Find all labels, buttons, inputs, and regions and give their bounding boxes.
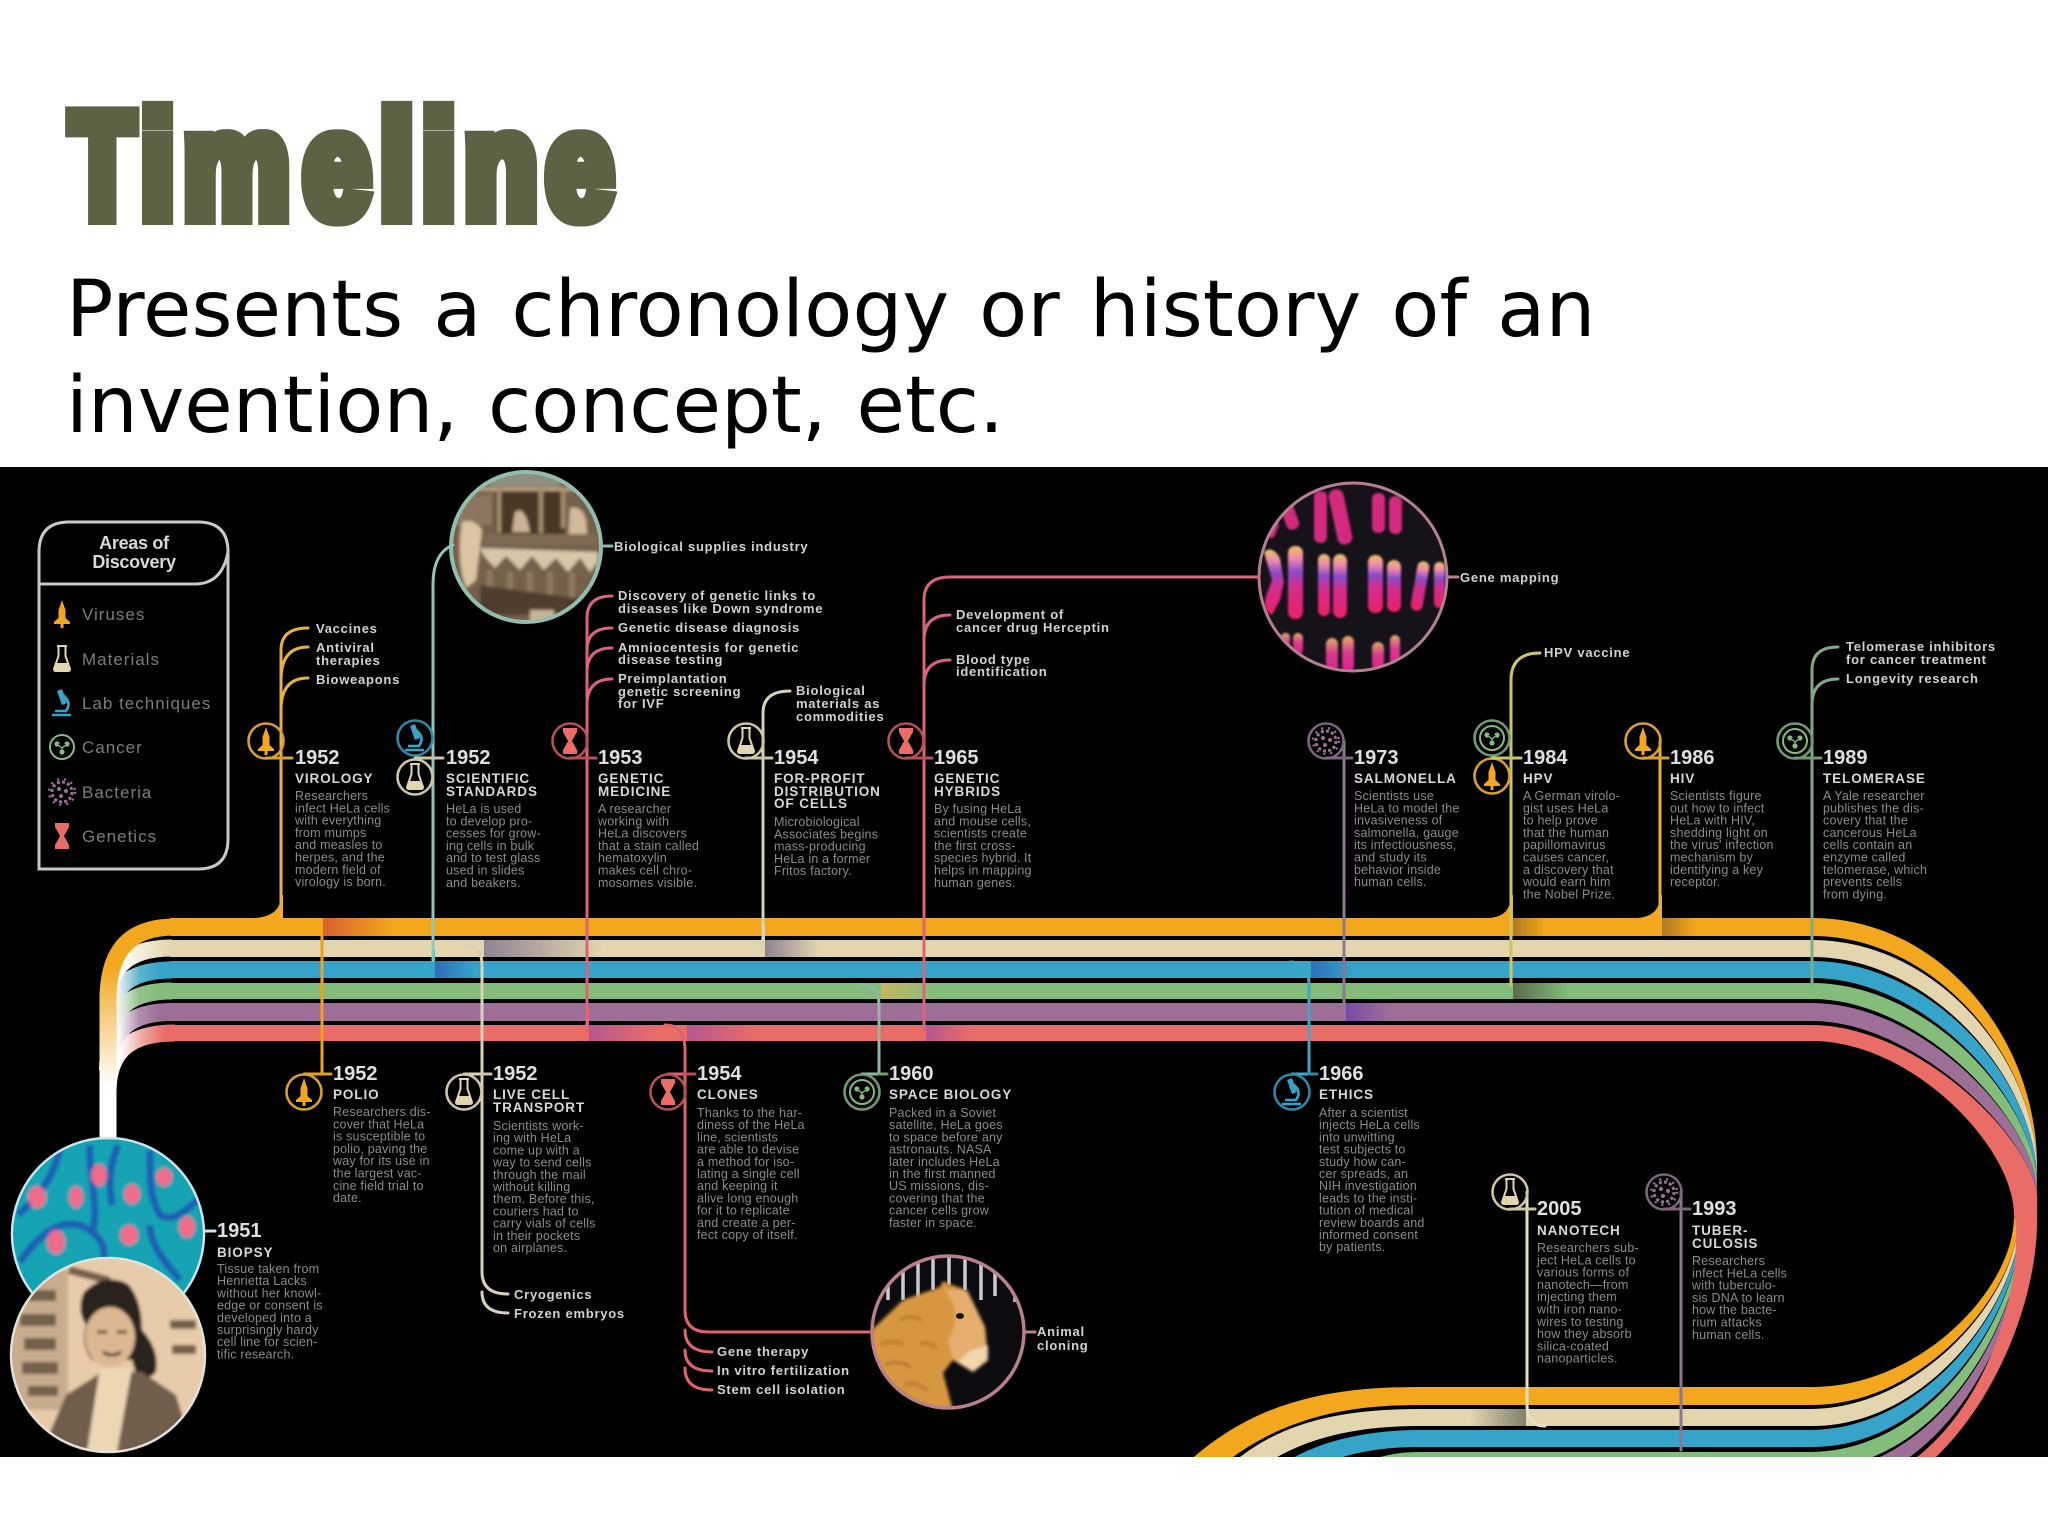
branch: 1966 ethics: NIH investigation	[1319, 1179, 1417, 1193]
branch: 1954 clones: line, scientists	[697, 1130, 778, 1144]
photo: cloned animal	[868, 1254, 1026, 1412]
branch: 1951 biopsy: developed into a	[217, 1311, 312, 1325]
branch: 1952 scientific standards: and beakers.	[446, 876, 521, 890]
branch: 1966 ethics: by patients.	[1319, 1240, 1385, 1254]
branch: 1989 telomerase: TELOMERASE	[1823, 771, 1926, 786]
branch: 1984 HPV: would earn him	[1522, 875, 1611, 889]
branch: 1954 clones: Animal	[1037, 1324, 1085, 1339]
branch: 1984 HPV: causes cancer,	[1523, 850, 1609, 864]
branch: 1966 ethics: study how can-	[1319, 1155, 1406, 1169]
branch: 1952 scientific standards	[398, 539, 808, 960]
branch: 1966 ethics: After a scientist	[1319, 1106, 1408, 1120]
branch: 1973 salmonella: invasiveness of	[1354, 814, 1443, 828]
branch: 1951 biopsy: edge or consent is	[217, 1299, 323, 1313]
icon: virus	[1626, 724, 1660, 758]
branch: 1965 genetic hybrids: human genes.	[934, 876, 1016, 890]
branch: 1952 polio: polio, paving the	[333, 1142, 427, 1156]
branch: 1952 live cell transport: way to send cells	[492, 1156, 592, 1170]
branch: 1984 HPV: HPV vaccine	[1544, 645, 1630, 660]
branch: 1986 HIV: identifying a key	[1670, 863, 1764, 877]
branch: 1952 scientific standards: and to test glass	[446, 851, 540, 865]
branch: 2005 nanotech: Researchers sub-	[1537, 1241, 1639, 1255]
branch: 1952 polio: cover that HeLa	[333, 1117, 424, 1131]
branch: 1952 scientific standards: cesses for grow-	[446, 827, 541, 841]
branch: 1952 polio: the largest vac-	[333, 1166, 422, 1180]
branch: 1953 genetic medicine: for IVF	[618, 696, 664, 711]
branch: 1952 live cell transport: on airplanes.	[493, 1241, 567, 1255]
legend item: lab techniques	[52, 689, 211, 715]
branch: 1951 biopsy: Henrietta Lacks	[217, 1274, 307, 1288]
branch: 1954 for-profit distribution	[728, 683, 884, 945]
branch: 1951 biopsy: 1951	[217, 1220, 262, 1242]
legend item: bacteria	[49, 779, 152, 805]
branch: 1960 space biology	[844, 985, 1012, 1230]
legend item: lab techniques: Lab techniques	[82, 694, 211, 713]
legend item: cancer	[50, 735, 143, 759]
icon: flask	[446, 1074, 482, 1110]
branch: 1952 polio	[286, 936, 431, 1205]
branch: 1993 tuberculosis: how the bacte-	[1692, 1303, 1777, 1317]
legend item: viruses	[54, 600, 145, 628]
branch: 1993 tuberculosis: human cells.	[1692, 1328, 1765, 1342]
branch: 1952 live cell transport: carry vials of cells	[493, 1217, 596, 1231]
branch: 2005 nanotech	[1492, 1174, 1639, 1426]
branch: 1973 salmonella: behavior inside	[1354, 863, 1441, 877]
branch: 1986 HIV: HIV	[1670, 771, 1695, 786]
branch: 1993 tuberculosis: Researchers	[1692, 1254, 1765, 1268]
icon: bacteria	[1646, 1174, 1682, 1210]
branch: 1993 tuberculosis: CULOSIS	[1692, 1236, 1758, 1251]
icon: cancer	[1474, 720, 1510, 756]
branch: 1989 telomerase: Telomerase inhibitors	[1846, 639, 1996, 654]
branch: 2005 nanotech: nanoparticles.	[1537, 1352, 1618, 1366]
branch: 1954 for-profit distribution: Associates begins	[774, 827, 878, 841]
branch: 1951 biopsy: without her knowl-	[216, 1286, 321, 1300]
branch: 1952 live cell transport: 1952	[493, 1063, 538, 1085]
icon: cancer	[1778, 724, 1812, 758]
branch: 1953 genetic medicine: Discovery of genetic links to	[618, 588, 816, 603]
branch: 1952 live cell transport: TRANSPORT	[493, 1100, 585, 1115]
branch: 1952 live cell transport: Scientists work-	[493, 1119, 584, 1133]
branch: 2005 nanotech: 2005	[1537, 1198, 1582, 1220]
branch: 1953 genetic medicine: diseases like Down syndrome	[618, 601, 823, 616]
branch: 1952 live cell transport: them. Before this,	[493, 1192, 595, 1206]
branch: 1954 clones: cloning	[1037, 1338, 1088, 1353]
branch: 1993 tuberculosis: sis DNA to learn	[1692, 1291, 1785, 1305]
branch: 1989 telomerase: 1989	[1823, 747, 1868, 769]
branch: 1984 HPV: papillomavirus	[1523, 838, 1606, 852]
branch: 2005 nanotech: NANOTECH	[1537, 1223, 1621, 1238]
branch: 1952 live cell transport: LIVE CELL	[493, 1087, 570, 1102]
branch: 1953 genetic medicine: GENETIC	[598, 771, 664, 786]
branch: 1952 virology: infect HeLa cells	[295, 801, 390, 815]
branch: 1952 scientific standards: HeLa is used	[446, 802, 521, 816]
branch: 1984 HPV: to help prove	[1523, 814, 1598, 828]
timeline ribbons	[108, 895, 2037, 1512]
branch: 1984 HPV: 1984	[1523, 747, 1568, 769]
branch: 1954 clones: for it to replicate	[697, 1204, 790, 1218]
branch: 1954 clones: a method for iso-	[697, 1155, 794, 1169]
branch: 1952 live cell transport: come up with a	[493, 1143, 580, 1157]
branch: 1986 HIV: out how to infect	[1670, 801, 1765, 815]
branch: 1951 biopsy: surprisingly hardy	[217, 1323, 319, 1337]
branch: 1993 tuberculosis: rium attacks	[1692, 1316, 1762, 1330]
branch: 1951 biopsy: Tissue taken from	[217, 1262, 319, 1276]
icon: flask	[1492, 1174, 1528, 1210]
branch: 1954 for-profit distribution: 1954	[774, 747, 819, 769]
branch: 1953 genetic medicine: that a stain called	[598, 839, 699, 853]
branch: 1984 HPV: that the human	[1523, 826, 1609, 840]
branch: 1952 scientific standards: to develop pro-	[446, 814, 532, 828]
branch: 1960 space biology: to space before any	[889, 1130, 1003, 1144]
branch: 1986 HIV: shedding light on	[1670, 826, 1768, 840]
branch: 1951 biopsy: tific research.	[217, 1347, 294, 1361]
branch: 1952 virology: Researchers	[295, 789, 368, 803]
branch: 1954 for-profit distribution: OF CELLS	[774, 796, 848, 811]
branch: 1952 polio: POLIO	[333, 1087, 380, 1102]
branch: 1984 HPV	[1474, 645, 1630, 985]
branch: 1966 ethics: ETHICS	[1319, 1087, 1374, 1102]
branch: 1989 telomerase: from dying.	[1823, 887, 1887, 901]
branch: 1966 ethics: injects HeLa cells	[1319, 1118, 1420, 1132]
branch: 1952 scientific standards: ing cells in bulk	[446, 839, 535, 853]
branch: 1973 salmonella: Scientists use	[1354, 789, 1434, 803]
branch: 1954 clones: Thanks to the har-	[697, 1106, 802, 1120]
legend item: materials	[54, 646, 160, 671]
branch: 1989 telomerase: prevents cells	[1823, 875, 1902, 889]
branch: 1965 genetic hybrids: helps in mapping	[934, 864, 1032, 878]
icon: flask	[728, 724, 764, 758]
legend item: bacteria: Bacteria	[82, 783, 152, 802]
branch: 1960 space biology: covering that the	[889, 1191, 985, 1205]
branch: 1952 live cell transport: Cryogenics	[514, 1287, 592, 1302]
panel: black timeline background	[0, 467, 2048, 1457]
branch: 1966 ethics	[1274, 962, 1425, 1254]
photo: Henrietta Lacks portrait	[10, 1257, 208, 1460]
branch: 1953 genetic medicine: mosomes visible.	[598, 876, 697, 890]
branch: 1952 live cell transport: without killing	[492, 1180, 570, 1194]
branch: 1952 virology: VIROLOGY	[295, 771, 373, 786]
legend heading: Areas of	[99, 533, 170, 553]
branch: 1954 for-profit distribution: DISTRIBUTION	[774, 784, 881, 799]
branch: 1952 virology: from mumps	[295, 826, 366, 840]
branch: 1966 ethics: review boards and	[1319, 1216, 1425, 1230]
branch: 1954 clones: lating a single cell	[697, 1167, 800, 1181]
branch: 1951 biopsy: cell line for scien-	[217, 1335, 318, 1349]
branch: 1952 scientific standards: Biological supplies industry	[614, 539, 808, 554]
branch: 1965 genetic hybrids: GENETIC	[934, 771, 1000, 786]
branch: 1954 clones: diness of the HeLa	[697, 1118, 805, 1132]
branch: 1966 ethics: into unwitting	[1319, 1130, 1395, 1144]
branch: 1986 HIV: mechanism by	[1670, 850, 1754, 864]
branch: 1953 genetic medicine: MEDICINE	[598, 784, 671, 799]
branch: 1954 clones: CLONES	[697, 1087, 759, 1102]
branch: 1966 ethics: cer spreads, an	[1319, 1167, 1408, 1181]
branch: 1952 polio: Researchers dis-	[333, 1105, 431, 1119]
branch: 1952 virology	[248, 621, 400, 918]
branch: 2005 nanotech: silica-coated	[1537, 1339, 1609, 1353]
branch: 1989 telomerase	[1778, 639, 1996, 985]
branch: 2005 nanotech: various forms of	[1537, 1266, 1629, 1280]
branch: 1952 polio: is susceptible to	[333, 1130, 425, 1144]
branch: 1953 genetic medicine: 1953	[598, 747, 642, 769]
icon: genetics	[650, 1074, 686, 1110]
branch: 1960 space biology: 1960	[889, 1063, 934, 1085]
branch: 1953 genetic medicine: disease testing	[618, 652, 723, 667]
icon: virus	[286, 1074, 322, 1110]
branch: 1965 genetic hybrids: Blood type	[956, 652, 1031, 667]
icon: virus	[1474, 758, 1510, 794]
branch: 1973 salmonella	[1308, 570, 1559, 1010]
icon: microscope	[398, 720, 432, 756]
year and text: 1952	[295, 747, 340, 769]
branch: 1952 virology: therapies	[316, 653, 381, 668]
branch: 1973 salmonella: Gene mapping	[1460, 570, 1559, 585]
branch: 1952 polio: 1952	[333, 1063, 378, 1085]
branch: 1986 HIV: the virus' infection	[1670, 838, 1774, 852]
branch: 1953 genetic medicine	[552, 588, 823, 1030]
branch: 1952 scientific standards: SCIENTIFIC	[446, 771, 530, 786]
branch: 1952 virology: with everything	[294, 814, 381, 828]
branch: 1952 virology: Vaccines	[316, 621, 378, 636]
title: T	[71, 80, 134, 251]
branch: 1954 clones: In vitro fertilization	[717, 1363, 850, 1378]
branch: 1984 HPV: A German virolo-	[1523, 789, 1620, 803]
branch: 1986 HIV: Scientists figure	[1670, 789, 1762, 803]
branch: 1966 ethics: 1966	[1319, 1063, 1364, 1085]
branch: 1965 genetic hybrids: scientists create	[934, 827, 1027, 841]
branch: 1989 telomerase: telomerase, which	[1823, 863, 1927, 877]
branch: 1965 genetic hybrids: species hybrid. It	[934, 851, 1032, 865]
icon: genetics	[552, 724, 588, 758]
branch: 1952 scientific standards: 1952	[446, 747, 490, 769]
branch: 1954 for-profit distribution: Biological	[796, 683, 866, 698]
branch: 1965 genetic hybrids	[888, 577, 1258, 1030]
title: imeline	[141, 81, 613, 250]
branch: 1954 clones: Stem cell isolation	[717, 1382, 845, 1397]
subtitle: invention, concept, etc.	[66, 359, 1004, 451]
branch: 1973 salmonella: salmonella, gauge	[1354, 826, 1459, 840]
branch: 1953 genetic medicine: A researcher	[598, 802, 671, 816]
branch: 1973 salmonella: HeLa to model the	[1354, 801, 1460, 815]
legend heading: Discovery	[92, 552, 176, 572]
legend item: cancer: Cancer	[82, 738, 143, 757]
branch: 1953 genetic medicine: Amniocentesis for genetic	[618, 640, 799, 655]
branch: 1989 telomerase: for cancer treatment	[1846, 652, 1987, 667]
branch: 1986 HIV: HeLa with HIV,	[1670, 814, 1755, 828]
branch: 1989 telomerase: cancerous HeLa	[1823, 826, 1917, 840]
branch: 1952 scientific standards: used in slides	[446, 864, 525, 878]
branch: 1952 polio: cine field trial to	[333, 1179, 424, 1193]
photo: HeLa cells	[10, 1136, 206, 1294]
branch: 1953 genetic medicine: makes cell chro-	[598, 864, 692, 878]
branch: 1953 genetic medicine: working with	[597, 814, 669, 828]
branch: 1965 genetic hybrids: HYBRIDS	[934, 784, 1001, 799]
branch: 1952 polio: way for its use in	[332, 1154, 430, 1168]
branch: 1986 HIV: 1986	[1670, 747, 1714, 769]
branch: 1965 genetic hybrids: cancer drug Herceptin	[956, 620, 1110, 635]
branch: 1952 virology: modern field of	[295, 863, 381, 877]
branch: 1989 telomerase: covery that the	[1823, 814, 1908, 828]
legend item: materials: Materials	[82, 650, 160, 669]
branch: 1993 tuberculosis: with tuberculo-	[1691, 1279, 1776, 1293]
icon: flask	[398, 760, 432, 794]
branch: 1954 clones: and keeping it	[697, 1179, 778, 1193]
branch: 1954 clones: 1954	[697, 1063, 742, 1085]
branch: 2005 nanotech: injecting them	[1537, 1290, 1617, 1304]
branch: 1989 telomerase: Longevity research	[1846, 671, 1979, 686]
branch: 1960 space biology: in the first manned	[889, 1167, 996, 1181]
branch: 1986 HIV	[1626, 724, 1774, 915]
branch: 1993 tuberculosis: TUBER-	[1692, 1223, 1748, 1238]
branch: 1952 scientific standards: STANDARDS	[446, 784, 538, 799]
branch: 1993 tuberculosis: infect HeLa cells	[1692, 1266, 1787, 1280]
branch: 2005 nanotech: ject HeLa cells to	[1536, 1253, 1636, 1267]
branch: 1951 biopsy: BIOPSY	[217, 1245, 273, 1260]
branch: 1952 virology: and measles to	[295, 838, 383, 852]
branch: 1965 genetic hybrids: By fusing HeLa	[934, 802, 1022, 816]
branch: 1952 live cell transport: through the mail	[493, 1168, 586, 1182]
branch: 1973 salmonella: its infectiousness,	[1354, 838, 1456, 852]
branch: 1966 ethics: test subjects to	[1319, 1143, 1406, 1157]
branch: 1984 HPV: a discovery that	[1523, 863, 1614, 877]
branch: 1989 telomerase: cells contain an	[1823, 838, 1912, 852]
branch: 1960 space biology: SPACE BIOLOGY	[889, 1087, 1012, 1102]
branch: 1966 ethics: informed consent	[1319, 1228, 1418, 1242]
branch: 1953 genetic medicine: Preimplantation	[618, 671, 728, 686]
subtitle: Presents a chronology or history of an	[66, 263, 1596, 355]
branch: 1960 space biology: later includes HeLa	[889, 1155, 1000, 1169]
branch: 2005 nanotech: nanotech—from	[1537, 1278, 1629, 1292]
branch: 1989 telomerase: enzyme called	[1823, 850, 1906, 864]
branch: 1952 live cell transport: in their pockets	[493, 1229, 580, 1243]
branch: 2005 nanotech: with iron nano-	[1536, 1302, 1622, 1316]
branch: 1954 clones: and create a per-	[697, 1216, 796, 1230]
branch: 1953 genetic medicine: HeLa discovers	[598, 827, 687, 841]
branch: 1973 salmonella: human cells.	[1354, 875, 1427, 889]
photo: biological supplies factory	[450, 470, 602, 625]
icon: bacteria	[1308, 724, 1344, 758]
branch: 1952 virology: virology is born.	[295, 875, 386, 889]
legend item: genetics: Genetics	[82, 827, 157, 846]
branch: 1993 tuberculosis	[1646, 1174, 1787, 1450]
branch: 1973 salmonella: 1973	[1354, 747, 1398, 769]
branch: 1952 virology: Antiviral	[316, 640, 375, 655]
branch: 1984 HPV: gist uses HeLa	[1523, 801, 1608, 815]
icon: virus	[248, 724, 284, 758]
legend item: viruses: Viruses	[82, 605, 145, 624]
branch: 1960 space biology: US missions, dis-	[889, 1179, 989, 1193]
branch: 1954 clones: Gene therapy	[717, 1344, 809, 1359]
icon: microscope	[1274, 1074, 1310, 1110]
branch: 1954 for-profit distribution: commodities	[796, 709, 884, 724]
icon: genetics	[888, 724, 924, 758]
branch: 1965 genetic hybrids: Development of	[956, 607, 1064, 622]
branch: 1952 live cell transport: ing with HeLa	[493, 1131, 571, 1145]
branch: 1965 genetic hybrids: identification	[956, 664, 1047, 679]
branch: 1954 clones: are able to devise	[697, 1143, 799, 1157]
branch: 1984 HPV: HPV	[1523, 771, 1553, 786]
branch: 2005 nanotech: wires to testing	[1536, 1315, 1624, 1329]
legend: areas of discovery	[39, 522, 228, 869]
legend item: genetics	[55, 823, 157, 849]
branch: 1954 clones	[650, 1025, 1088, 1397]
branch: 1952 live cell transport	[446, 945, 625, 1321]
branch: 1960 space biology: Packed in a Soviet	[889, 1106, 996, 1120]
branch: 1954 for-profit distribution: materials as	[796, 696, 880, 711]
branch: 1989 telomerase: A Yale researcher	[1823, 789, 1925, 803]
branch: 1953 genetic medicine: genetic screening	[618, 684, 741, 699]
branch: 1965 genetic hybrids: 1965	[934, 747, 978, 769]
branch: 1984 HPV: the Nobel Prize.	[1523, 887, 1615, 901]
branch: 1954 clones: fect copy of itself.	[697, 1228, 798, 1242]
branch: 1993 tuberculosis: 1993	[1692, 1198, 1736, 1220]
branch: 1951 biopsy	[204, 1220, 323, 1361]
branch: 1952 live cell transport: couriers had to	[493, 1204, 579, 1218]
branch: 1966 ethics: tution of medical	[1319, 1204, 1413, 1218]
branch: 2005 nanotech: how they absorb	[1537, 1327, 1632, 1341]
branch: 1952 polio: date.	[333, 1191, 362, 1205]
icon: cancer	[844, 1074, 880, 1110]
branch: 1953 genetic medicine: hematoxylin	[598, 851, 667, 865]
branch: 1954 for-profit distribution: FOR-PROFIT	[774, 771, 866, 786]
photo: chromosomes	[1258, 482, 1448, 672]
branch: 1953 genetic medicine: Genetic disease diagnosis	[618, 620, 800, 635]
branch: 1954 clones: alive long enough	[697, 1191, 798, 1205]
branch: 1989 telomerase: publishes the dis-	[1823, 801, 1924, 815]
branch: 1954 for-profit distribution: HeLa in a former	[774, 852, 870, 866]
branch: 1952 live cell transport: Frozen embryos	[514, 1306, 625, 1321]
branch: 1986 HIV: receptor.	[1670, 875, 1720, 889]
branch: 1965 genetic hybrids: and mouse cells,	[934, 814, 1031, 828]
branch: 1965 genetic hybrids: the first cross-	[934, 839, 1016, 853]
branch: 1960 space biology: astronauts. NASA	[889, 1143, 992, 1157]
branch: 1960 space biology: cancer cells grow	[889, 1204, 990, 1218]
branch: 1973 salmonella: and study its	[1354, 850, 1427, 864]
branch: 1954 for-profit distribution: Fritos factory.	[774, 864, 852, 878]
branch: 1954 for-profit distribution: mass-producing	[774, 840, 866, 854]
branch: 1954 for-profit distribution: Microbiological	[774, 815, 860, 829]
branch: 1973 salmonella: SALMONELLA	[1354, 771, 1457, 786]
branch: 1952 virology: Bioweapons	[316, 672, 400, 687]
branch: 1960 space biology: satellite, HeLa goes	[889, 1118, 1003, 1132]
branch: 1952 virology: herpes, and the	[295, 850, 385, 864]
branch: 1966 ethics: leads to the insti-	[1319, 1191, 1417, 1205]
branch: 1960 space biology: faster in space.	[889, 1216, 977, 1230]
